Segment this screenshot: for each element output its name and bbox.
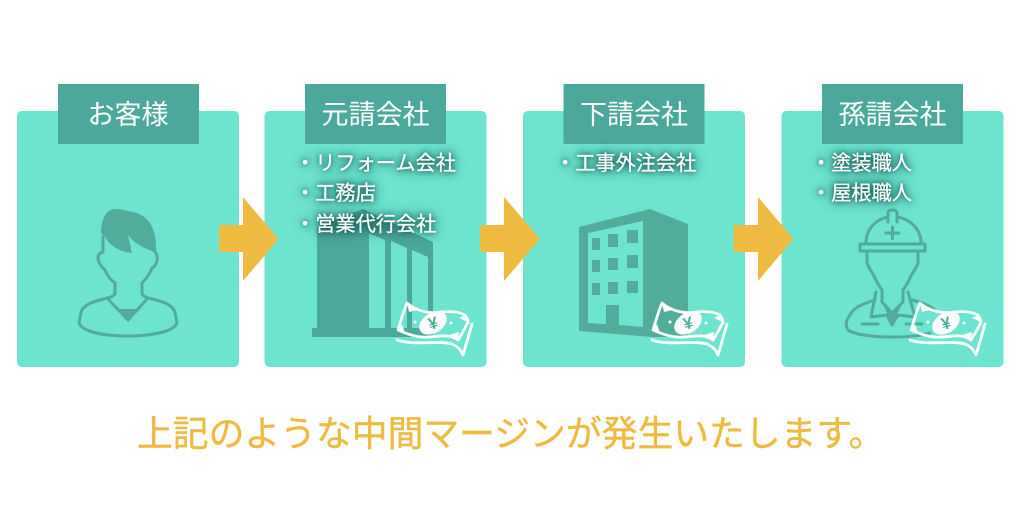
heading: 下請会社 <box>564 84 704 144</box>
icon: money: ¥ <box>426 313 441 334</box>
panel: 下請会社 <box>523 84 745 367</box>
icon: money: ¥ <box>939 313 954 334</box>
icon: money <box>397 303 472 355</box>
icon: office windows <box>592 230 638 295</box>
arrow 3 <box>734 197 794 281</box>
panel: 元請会社 <box>264 84 486 367</box>
panel background <box>782 111 1004 367</box>
list: subcontractor types: ・工事外注会社 <box>555 152 696 175</box>
list: contractor types <box>295 152 456 236</box>
heading: 孫請会社: 孫請会社 <box>838 100 946 130</box>
list: contractor types: ・工務店 <box>295 182 376 205</box>
heading: 下請会社: 下請会社 <box>580 100 688 130</box>
list: craftsmen: ・塗装職人 <box>811 152 912 175</box>
icon: money: ¥ <box>681 313 696 334</box>
icon: customer <box>79 209 177 336</box>
icon: large building <box>312 209 433 337</box>
panel: 孫請会社 <box>782 84 1004 367</box>
list: craftsmen: ・屋根職人 <box>811 182 912 205</box>
list: contractor types: ・リフォーム会社 <box>295 152 456 175</box>
list: contractor types: ・営業代行会社 <box>295 213 436 236</box>
list: craftsmen <box>811 152 912 205</box>
icon: money <box>652 303 727 355</box>
heading: 元請会社: 元請会社 <box>322 100 430 130</box>
icon: worker <box>846 210 934 337</box>
panel background <box>264 111 486 367</box>
heading: お客様: お客様 <box>88 100 168 130</box>
panel background <box>17 111 239 367</box>
caption: 上記のような中間マージンが発生いたします。 <box>137 414 884 454</box>
panel: お客様 <box>17 84 239 367</box>
icon: money <box>910 303 985 355</box>
heading: お客様 <box>58 84 199 144</box>
panel background <box>523 111 745 367</box>
heading: 孫請会社 <box>822 84 963 144</box>
arrow 1 <box>219 197 278 281</box>
heading: 元請会社 <box>305 84 446 144</box>
arrow 2 <box>480 197 540 281</box>
icon: office building <box>579 209 688 337</box>
